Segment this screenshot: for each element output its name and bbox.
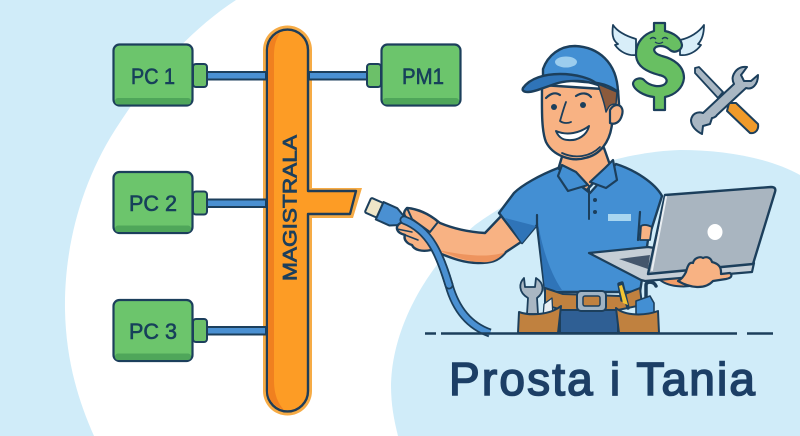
- person: technician: [397, 46, 775, 333]
- neck: [558, 148, 610, 192]
- icon: wrench and screwdriver: [691, 67, 758, 134]
- cable with plug: [364, 197, 490, 333]
- arm and hand: [397, 208, 524, 285]
- shirt: [499, 160, 662, 292]
- ground line: [425, 332, 773, 335]
- tool belt: [518, 278, 659, 333]
- node: PM1: [309, 44, 460, 106]
- title: Prosta i Tania: [449, 353, 755, 405]
- bus label: MAGISTRALA: [280, 135, 302, 281]
- head: [542, 84, 623, 159]
- node: PC 1: PC 1: [131, 64, 175, 89]
- holding hand: [678, 257, 731, 287]
- node: PM1: PM1: [402, 64, 444, 89]
- icon: flying dollar: [613, 23, 704, 110]
- node: PC 3: [114, 300, 266, 361]
- bus: magistrala: [263, 26, 362, 415]
- node: PC 2: PC 2: [129, 191, 177, 216]
- laptop: [589, 187, 775, 286]
- node: PC 3: PC 3: [129, 319, 177, 344]
- belt wrench: [520, 278, 543, 314]
- node: PC 1: [114, 44, 266, 106]
- node: PC 2: [114, 172, 266, 233]
- cap: [523, 46, 618, 92]
